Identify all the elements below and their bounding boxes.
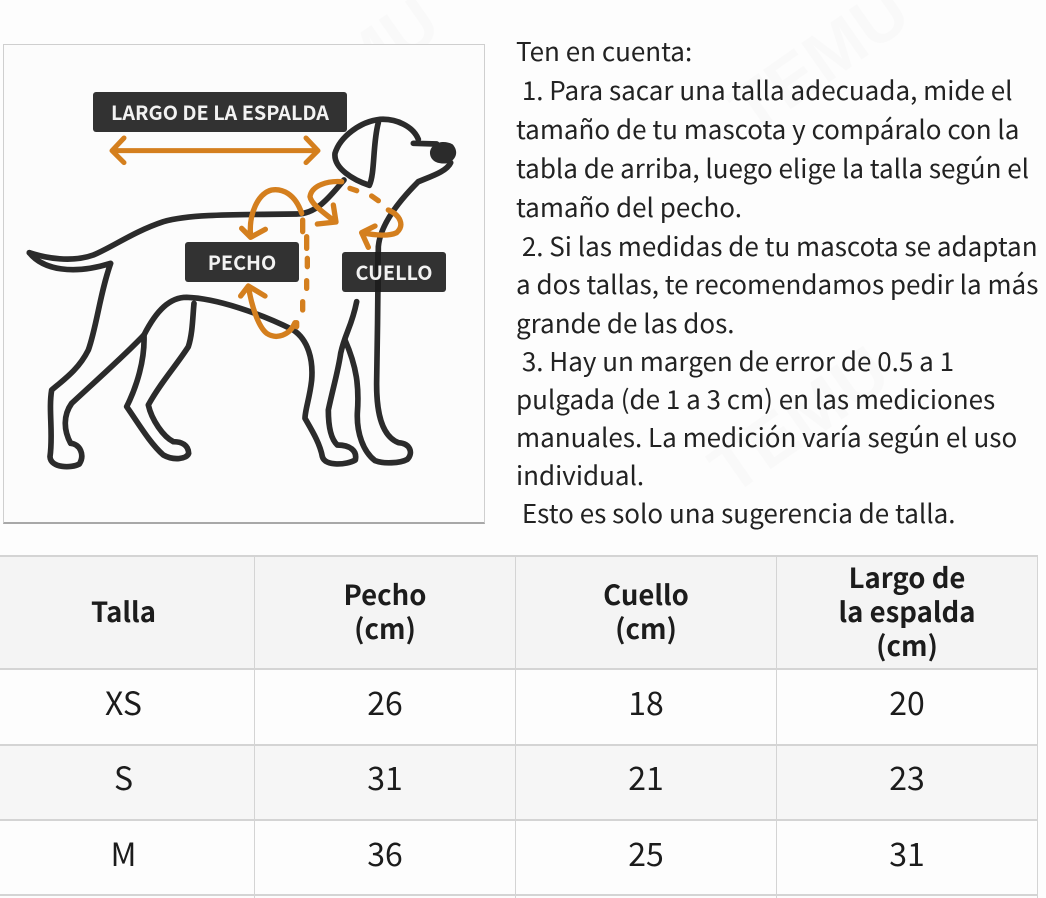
- text block: size notes: manuales. La medición varía según el uso: [516, 418, 1017, 455]
- size table: 21: [628, 754, 664, 800]
- label: largo de la espalda: LARGO DE LA ESPALDA: [111, 96, 329, 126]
- measurement arrows: [112, 138, 401, 336]
- label: pecho: [185, 242, 299, 282]
- size table: la espalda: [839, 590, 975, 630]
- size table: S: [114, 754, 133, 800]
- size table: 36: [367, 830, 403, 876]
- text block: size notes: tamaño de tu mascota y compáralo con la: [516, 110, 1019, 147]
- text block: size notes: tamaño del pecho.: [516, 188, 742, 225]
- dog outline: [29, 119, 451, 467]
- text block: size notes: 2. Si las medidas de tu mascota se adaptan: [522, 227, 1038, 264]
- size table: Pecho: [344, 573, 426, 613]
- text block: size notes: pulgada (de 1 a 3 cm) en las mediciones: [516, 380, 995, 417]
- illustration: dog outline with measurement arrows: [26, 116, 456, 470]
- panel: dog measurement diagram: [3, 44, 485, 524]
- size table: 18: [628, 679, 664, 725]
- size table: (cm): [354, 607, 416, 647]
- text block: size notes: 3. Hay un margen de error de 0.5 a 1: [522, 342, 954, 379]
- size table: M: [110, 830, 136, 876]
- text block: size notes: [516, 32, 1038, 531]
- size table: 26: [367, 679, 403, 725]
- size table: Talla: [91, 590, 156, 630]
- size table: Largo de: [849, 556, 965, 596]
- size table: XS: [105, 679, 142, 725]
- text block: size notes: Ten en cuenta:: [516, 32, 692, 69]
- size table: 20: [889, 679, 925, 725]
- label: cuello: CUELLO: [356, 256, 432, 286]
- text block: size notes: 1. Para sacar una talla adecuada, mide el: [522, 71, 1012, 108]
- text block: size notes: tabla de arriba, luego elige la talla según el: [516, 149, 1029, 186]
- text block: size notes: Esto es solo una sugerencia de talla.: [522, 494, 955, 531]
- size table: 25: [628, 830, 664, 876]
- size table: (cm): [876, 624, 938, 664]
- text block: size notes: a dos tallas, te recomendamos pedir la más: [516, 265, 1038, 302]
- size table: 23: [889, 754, 925, 800]
- text block: size notes: grande de las dos.: [516, 304, 735, 341]
- text block: size notes: individual.: [516, 456, 644, 493]
- label: cuello: [342, 252, 446, 292]
- size table: (cm): [615, 607, 677, 647]
- size table: [0, 555, 1038, 898]
- size table: Cuello: [603, 573, 689, 613]
- size table: 31: [889, 830, 925, 876]
- label: pecho: PECHO: [208, 246, 276, 276]
- label: largo de la espalda: [93, 92, 347, 132]
- size table: 31: [367, 754, 403, 800]
- icon: dog nose: [430, 142, 456, 164]
